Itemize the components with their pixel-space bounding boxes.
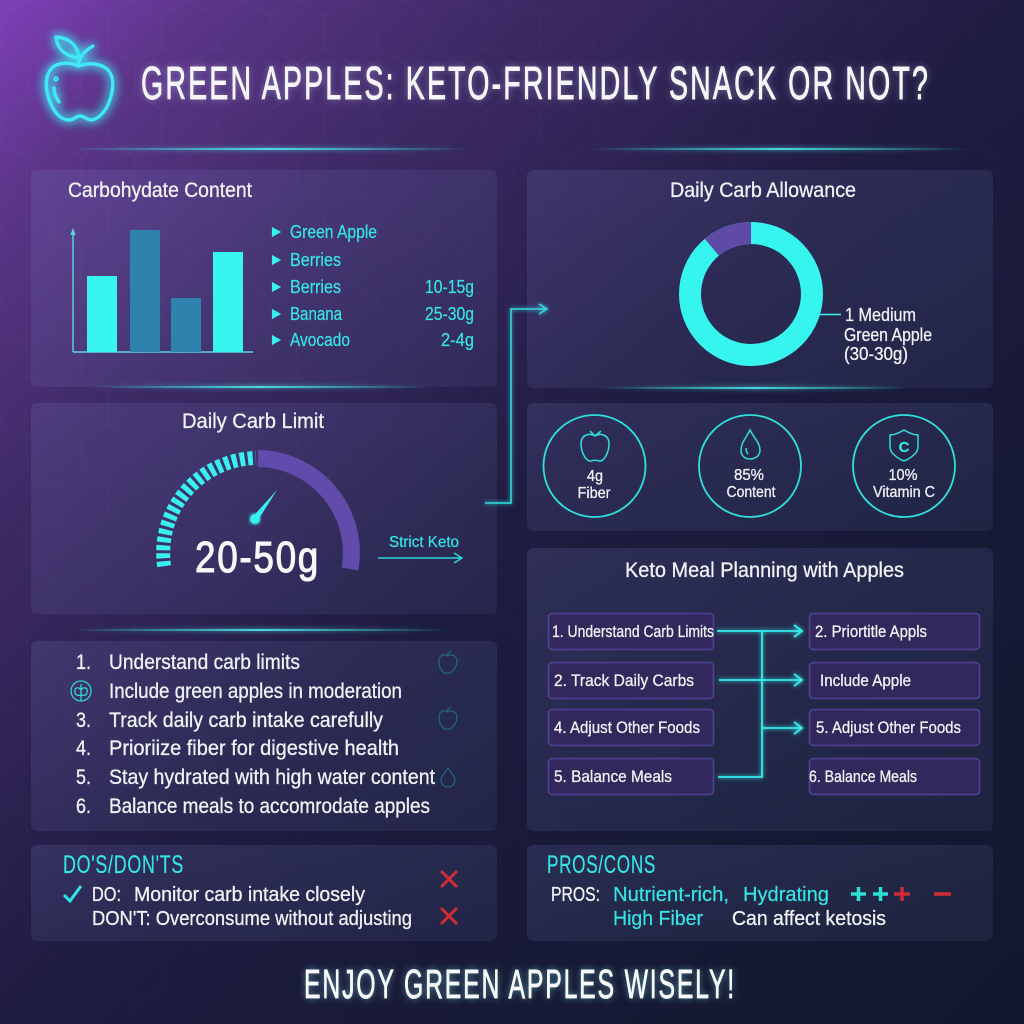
numbered tips: Understand carb limits	[109, 651, 300, 674]
panel: do's and don'ts	[31, 845, 497, 941]
heading: keto meal planning: Keto Meal Planning with Apples	[625, 559, 904, 582]
stat: vitamin c: C	[899, 439, 910, 456]
pros text: Can affect ketosis	[732, 908, 886, 930]
heading: daily carb limit: Daily Carb Limit	[182, 410, 324, 433]
numbered tips: Stay hydrated with high water content	[109, 766, 435, 789]
footer slogan: ENJOY GREEN APPLES WISELY!	[304, 961, 736, 1007]
panel: nutrition stats	[527, 403, 993, 531]
panel: daily carb allowance	[527, 170, 993, 388]
numbered tips: 6.	[76, 795, 91, 818]
right steps: 6. Balance Meals	[809, 767, 917, 786]
pros text: Nutrient-rich,	[613, 884, 729, 906]
stat: fiber	[544, 415, 646, 517]
gauge chart	[163, 458, 351, 582]
left steps: 4. Adjust Other Foods	[554, 718, 700, 737]
panel: pros and cons	[527, 845, 993, 941]
heading: daily carb allowance: Daily Carb Allowance	[670, 179, 856, 202]
legend list: Green Apple	[290, 222, 377, 242]
plus and minus marks	[851, 887, 951, 901]
stat: water content	[699, 415, 801, 517]
numbered tips: Balance meals to accomrodate apples	[109, 795, 430, 818]
strict keto arrow	[378, 534, 462, 563]
donut callout: (30-30g)	[844, 343, 908, 364]
numbered tips: 3.	[76, 709, 91, 732]
legend list	[272, 222, 474, 350]
stat: water content: 85%	[734, 467, 764, 484]
stat: fiber: Fiber	[578, 485, 611, 502]
legend list: 10-15g	[425, 277, 474, 297]
stat: fiber: 4g	[587, 468, 603, 485]
connector arrow	[485, 304, 547, 503]
numbered tips: Prioriize fiber for digestive health	[109, 737, 399, 760]
don't text: DON'T: Overconsume without adjusting	[92, 908, 412, 930]
heading: pros and cons: PROS/CONS	[547, 851, 656, 879]
donut callout	[815, 304, 932, 364]
icon: faint apple	[439, 651, 457, 673]
do text: DO:	[92, 884, 121, 906]
left steps: 5. Balance Meals	[554, 767, 672, 786]
numbered tips: Include green apples in moderation	[109, 680, 402, 703]
donut callout: Green Apple	[844, 324, 932, 345]
stat: vitamin c: 10%	[888, 467, 918, 484]
heading: do's and don'ts: DO'S/DON'TS	[63, 851, 184, 879]
icon: brain	[71, 681, 91, 701]
panel: carbohydrate content	[31, 170, 497, 387]
stat: vitamin c: Vitamin C	[873, 484, 935, 501]
numbered tips: 4.	[76, 737, 91, 760]
donut chart	[690, 233, 812, 355]
legend list: 2-4g	[441, 330, 474, 350]
icon: glowing apple	[46, 37, 113, 120]
legend list: Berries	[290, 277, 341, 297]
pros text: High Fiber	[613, 908, 703, 930]
numbered tips	[76, 651, 435, 818]
left steps: 2. Track Daily Carbs	[554, 671, 694, 690]
panel: keto meal planning	[527, 548, 993, 831]
heading: carbohydrate content: Carbohydate Content	[68, 179, 252, 202]
panel: daily carb limit	[31, 403, 497, 614]
gauge chart: 20-50g	[195, 533, 320, 582]
legend list: 25-30g	[425, 304, 474, 324]
strict keto arrow: Strict Keto	[389, 534, 459, 551]
legend list: Berries	[290, 250, 341, 270]
numbered tips: Track daily carb intake carefully	[109, 709, 383, 732]
stat: water content: Content	[726, 484, 776, 501]
pros text: PROS:	[551, 884, 600, 906]
right steps: 2. Priortitle Appls	[815, 622, 927, 641]
icon: faint apple two	[439, 707, 457, 729]
right steps: Include Apple	[820, 671, 911, 690]
stat: vitamin c	[853, 415, 955, 517]
flow arrows	[717, 625, 802, 777]
left steps	[548, 614, 714, 794]
icon: faint water drop	[441, 768, 455, 787]
donut callout: 1 Medium	[845, 304, 916, 325]
legend list: Avocado	[290, 330, 350, 350]
pros text: Hydrating	[743, 884, 829, 906]
right steps: 5. Adjust Other Foods	[816, 718, 961, 737]
icon: check mark	[64, 886, 81, 901]
icon: red crosses	[441, 871, 457, 924]
legend list: Banana	[290, 304, 343, 324]
do text: Monitor carb intake closely	[134, 884, 365, 906]
bar chart	[70, 228, 253, 352]
pros text	[551, 884, 886, 930]
right steps	[809, 614, 980, 794]
left steps: 1. Understand Carb Limits	[552, 622, 714, 641]
panel: tips list	[31, 641, 497, 831]
numbered tips: 1.	[76, 651, 91, 674]
numbered tips: 5.	[76, 766, 91, 789]
